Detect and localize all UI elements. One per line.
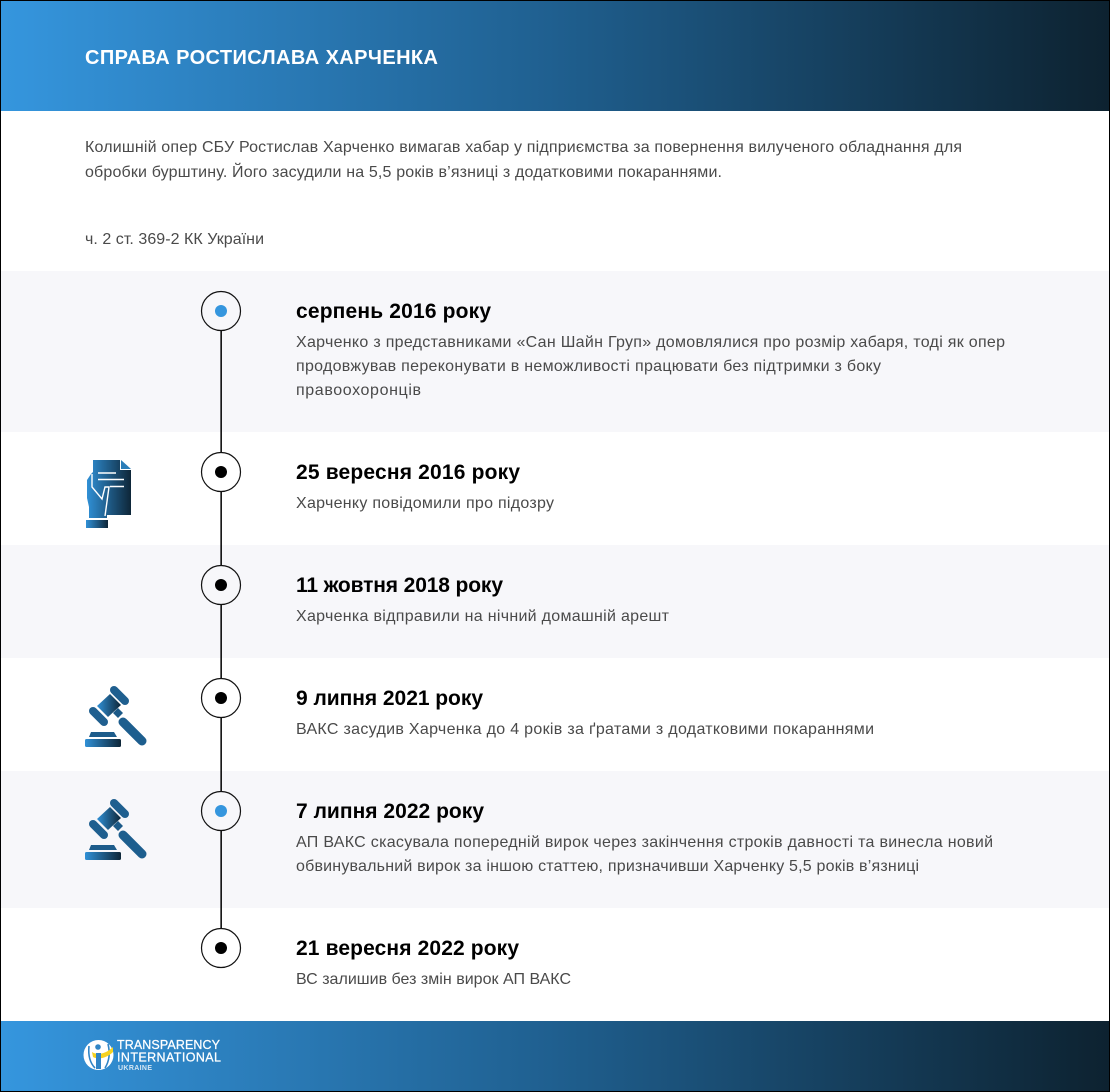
event: 21 September 2022: 21 вересня 2022 року [296,937,519,960]
event: August 2016: продовжував переконувати в неможливості працювати без підтримки з боку [296,358,881,375]
event: 9 July 2021 [202,678,874,738]
logo: Transparency International Ukraine [84,1038,221,1072]
event: 25 September 2016 [202,452,554,512]
row backgrounds [1,271,1109,908]
event: 25 September 2016: Харченку повідомили про підозру [296,495,554,512]
icon: hand holding document [86,460,131,528]
event: 11 October 2018: Харченка відправили на нічний домашній арешт [296,608,670,625]
event: 7 July 2022 [202,792,993,875]
event: 11 October 2018 [202,566,670,625]
header band [1,1,1109,111]
event: August 2016: серпень 2016 року [296,300,491,323]
icon: gavel [85,803,142,860]
title: СПРАВА РОСТИСЛАВА ХАРЧЕНКА [85,47,438,69]
event: 7 July 2022: 7 липня 2022 року [296,800,484,823]
event: 9 July 2021: 9 липня 2021 року [296,687,483,710]
event: 25 September 2016: 25 вересня 2016 року [296,461,520,484]
icon: gavel [85,690,142,747]
event: 21 September 2022: ВС залишив без змін вирок АП ВАКС [296,971,571,988]
logo: Transparency International Ukraine: UKRAINE [118,1065,152,1072]
event: 9 July 2021: ВАКС засудив Харченка до 4 років за ґратами з додатковими покараннями [296,721,874,738]
legal article: ч. 2 ст. 369-2 КК України [85,231,264,248]
event: 21 September 2022 [202,928,571,988]
logo: Transparency International Ukraine: TRANSPARENCY [117,1038,221,1052]
timeline axis [220,330,222,930]
event: August 2016: Харченко з представниками «Сан Шайн Груп» домовлялися про розмір хабаря, тоді як опер [296,334,1005,351]
event: 7 July 2022: обвинувальний вирок за іншою статтею, призначивши Харченку 5,5 років в’язниці [296,858,919,875]
event: August 2016: правоохоронців [296,382,421,399]
intro text: Колишній опер СБУ Ростислав Харченко вимагав хабар у підприємства за повернення вилученого обладнання для [85,139,962,156]
logo: Transparency International Ukraine: INTERNATIONAL [117,1050,221,1064]
intro text [85,139,962,181]
event: 7 July 2022: АП ВАКС скасувала попередній вирок через закінчення строків давності та винесла новий [296,834,993,851]
event: 11 October 2018: 11 жовтня 2018 року [296,574,503,597]
intro text: обробки бурштину. Його засудили на 5,5 років в’язниці з додатковими покараннями. [85,162,722,181]
event: August 2016 [202,292,1005,399]
footer band [1,1021,1109,1091]
